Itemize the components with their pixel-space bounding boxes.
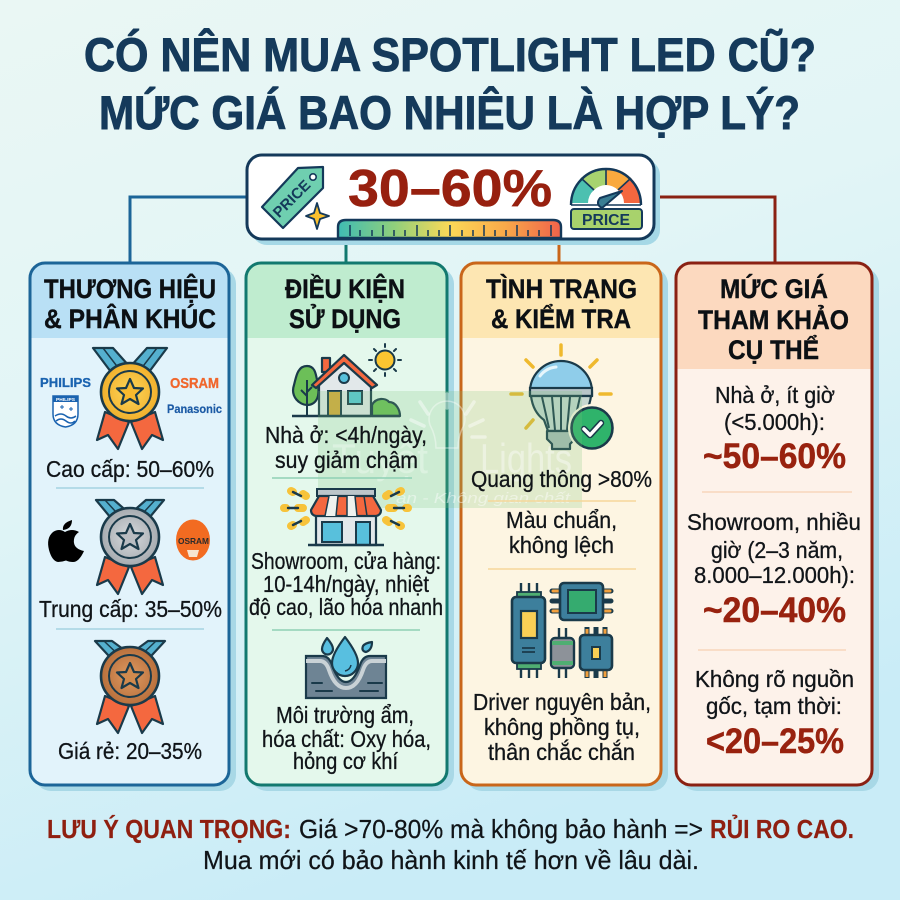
price: unknown origin: Không rõ nguồn [695, 666, 854, 692]
panel: thương hiệu & phân khúc [30, 263, 236, 791]
text: driver condition [473, 689, 651, 765]
price: showroom [687, 509, 861, 630]
text: driver condition: không phồng tụ, [484, 714, 640, 740]
watermark: Tuyệt [332, 435, 428, 482]
panel: mức giá tham khảo cụ thể [676, 263, 879, 791]
price: showroom: ~20–40% [703, 591, 846, 630]
text: showroom use: 10-14h/ngày, nhiệt [263, 571, 430, 597]
price: home [703, 382, 846, 476]
icon: gold medal [93, 348, 167, 449]
heading: THAM KHẢO [698, 303, 849, 335]
heading [698, 273, 849, 365]
label: budget: Giá rẻ: 20–35% [58, 738, 202, 764]
panel: điều kiện sử dụng [246, 263, 454, 791]
title: CÓ NÊN MUA SPOTLIGHT LED CŨ? [84, 28, 816, 81]
logo: Osram: OSRAM [170, 375, 219, 392]
heading [44, 273, 216, 334]
heading: MỨC GIÁ [720, 273, 828, 304]
heading: & KIỂM TRA [491, 303, 631, 334]
price: showroom: 8.000–12.000h): [694, 562, 855, 588]
text: colour accuracy: Màu chuẩn, [506, 507, 617, 533]
title [84, 28, 816, 139]
footer note: Giá >70-80% mà không bảo hành => [299, 814, 703, 844]
text: showroom use [249, 548, 443, 620]
heading: SỬ DỤNG [289, 302, 401, 334]
icon: price tag [262, 167, 329, 229]
label: mid range: Trung cấp: 35–50% [39, 596, 222, 622]
price: unknown origin [695, 666, 854, 761]
icon: price gauge: PRICE [582, 212, 630, 229]
footer note: LƯU Ý QUAN TRỌNG: [47, 814, 291, 844]
icon: silver medal [96, 500, 164, 594]
icon: driver electronics [512, 583, 612, 678]
icon: house and sun [292, 344, 401, 416]
main percentage: 30–60% [348, 160, 552, 218]
price: unknown origin: gốc, tạm thời: [706, 693, 842, 719]
icon: water drop on corroded ground [306, 637, 386, 698]
text: home use: suy giảm chậm [275, 447, 418, 473]
icon: price gauge [571, 168, 642, 229]
text: home use [265, 422, 427, 473]
footer note: Mua mới có bảo hành kinh tế hơn về lâu dài. [203, 845, 699, 875]
logo: Philips: PHILIPS [56, 397, 75, 402]
text: harsh environment [262, 702, 431, 774]
logo: Osram bulb [176, 520, 210, 560]
heading [285, 273, 405, 334]
icon: bronze medal [95, 641, 165, 733]
heading: CỤ THỂ [728, 334, 819, 365]
heading: TÌNH TRẠNG [486, 273, 637, 304]
price: home: Nhà ở, ít giờ [715, 382, 835, 408]
watermark: ân - Không gian chất [396, 490, 571, 507]
text: harsh environment: hỏng cơ khí [293, 748, 399, 774]
text: showroom use: độ cao, lão hóa nhanh [249, 594, 443, 620]
heading [486, 273, 637, 334]
icon: storefront with light rays [284, 489, 408, 545]
heading: THƯƠNG HIỆU [44, 273, 216, 304]
label: premium: Cao cấp: 50–60% [46, 456, 214, 482]
heading: & PHÂN KHÚC [44, 303, 216, 334]
price: showroom: giờ (2–3 năm, [711, 537, 843, 563]
price: home: ~50–60% [703, 437, 846, 476]
logo: Philips [40, 375, 91, 427]
icon: price tag: PRICE [270, 177, 314, 221]
logo: Philips: PHILIPS [40, 375, 91, 390]
heading: ĐIỀU KIỆN [285, 273, 405, 304]
connector lines [130, 197, 775, 263]
text: home use: Nhà ở: <4h/ngày, [265, 422, 427, 448]
text: luminous flux: Quang thông >80% [471, 466, 652, 492]
price: home: (<5.000h): [724, 409, 825, 435]
logo: Osram bulb: OSRAM [178, 536, 209, 546]
logo: Panasonic: Panasonic [167, 402, 222, 416]
watermark: Lights [480, 435, 572, 482]
text: harsh environment: Môi trường ẩm, [276, 702, 414, 728]
text: driver condition: Driver nguyên bản, [473, 689, 651, 715]
text: showroom use: Showroom, cửa hàng: [251, 548, 441, 574]
logo: Apple [48, 520, 84, 562]
footer note [47, 813, 854, 875]
footer note: RỦI RO CAO. [710, 813, 854, 844]
ruler scale [338, 220, 561, 238]
headline range box [247, 155, 660, 245]
icon: LED bulb with check [511, 345, 616, 452]
title: MỨC GIÁ BAO NHIÊU LÀ HỢP LÝ? [99, 86, 800, 139]
text: colour accuracy [506, 507, 617, 558]
price: unknown origin: <20–25% [706, 722, 844, 761]
watermark [318, 391, 582, 508]
price: showroom: Showroom, nhiều [687, 509, 861, 535]
text: driver condition: thân chắc chắn [488, 739, 635, 765]
text: harsh environment: hóa chất: Oxy hóa, [262, 726, 431, 752]
panel: tình trạng & kiểm tra [461, 263, 668, 791]
text: colour accuracy: không lệch [509, 532, 614, 558]
